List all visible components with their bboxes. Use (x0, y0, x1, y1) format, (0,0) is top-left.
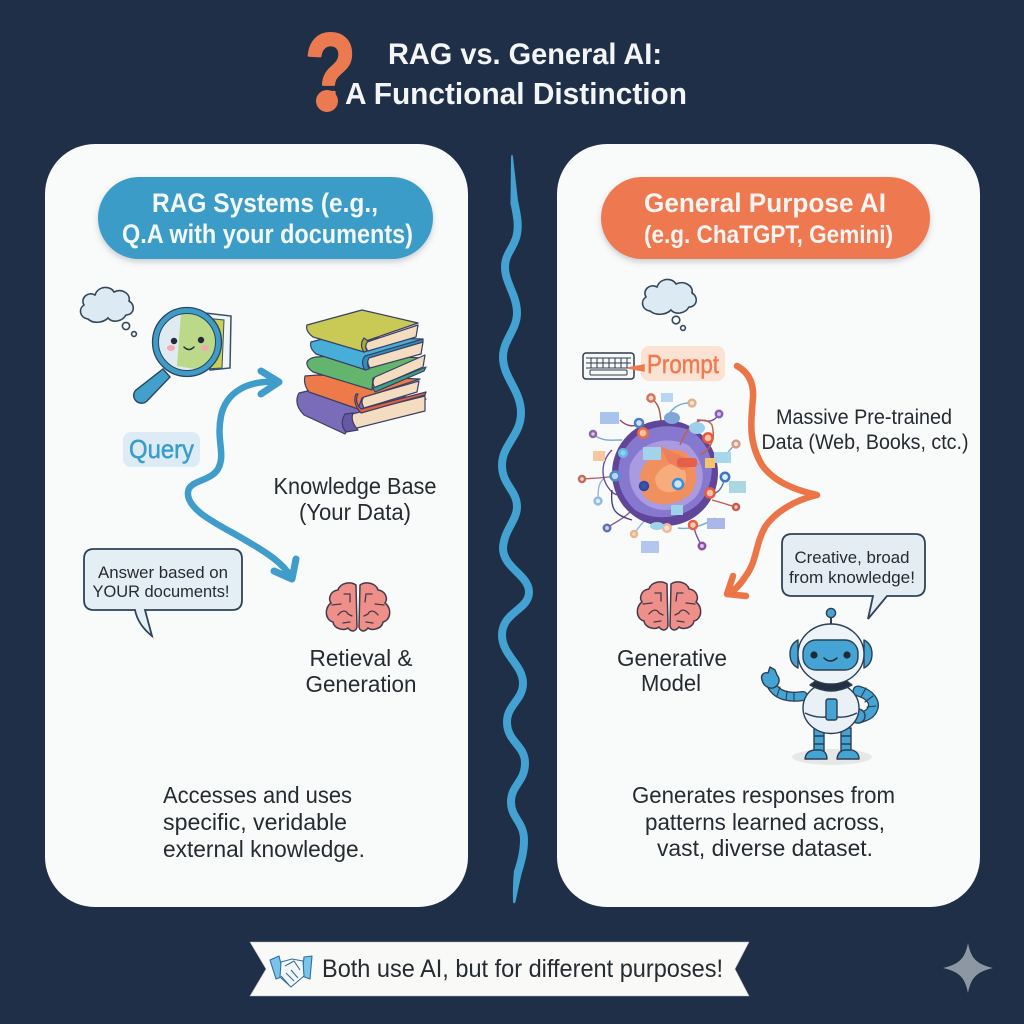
heading pill: RAG Systems: Q.A with your documents) (122, 219, 413, 249)
blue book (311, 337, 423, 370)
callout: answer based on your documents (84, 549, 242, 636)
label: massive pre-trained data: Massive Pre-trained (776, 406, 952, 429)
label: Knowledge Base: (Your Data) (299, 499, 411, 525)
panel: General Purpose AI (557, 144, 980, 907)
label: Knowledge Base (274, 473, 436, 525)
heading pill: RAG Systems (98, 177, 433, 259)
callout: answer based on your documents: Answer based on (98, 563, 228, 582)
icon: thought cloud (81, 287, 136, 336)
connector lines (582, 398, 736, 546)
label: Knowledge Base: Knowledge Base (274, 473, 436, 499)
network nodes (579, 394, 739, 549)
text block: general AI summary: vast, diverse dataset. (657, 835, 873, 861)
heading pill: General Purpose AI: General Purpose AI (644, 188, 886, 218)
icon: brain (637, 582, 701, 630)
label: massive pre-trained data: Data (Web, Books, ctc.) (762, 431, 968, 454)
title line two: A Functional Distinction (345, 76, 687, 111)
heading pill: General Purpose AI: (e.g. ChaTGPT, Gemini) (644, 221, 893, 249)
icon: thought cloud (643, 279, 696, 330)
purple book (297, 388, 426, 434)
icon: handshake (270, 956, 312, 987)
heading pill: RAG Systems: RAG Systems (e.g., (152, 188, 378, 218)
text block: general AI summary: Generates responses from (632, 782, 895, 808)
text block: RAG summary: Accesses and uses (163, 782, 352, 808)
panel: RAG systems (45, 144, 468, 907)
icon: question mark: ? (305, 12, 356, 128)
label: Query: Query (129, 434, 194, 464)
divider: wavy line (502, 154, 529, 904)
icon: neural data orb (579, 393, 746, 553)
olive book (307, 310, 418, 352)
label: Generative Model: Model (641, 670, 701, 696)
ribbon banner (250, 942, 749, 996)
label: Prompt: Prompt (647, 349, 720, 379)
robot head (830, 617, 832, 625)
banner text: Both use AI, but for different purposes! (322, 955, 723, 983)
text block: general AI summary: patterns learned across, (645, 809, 885, 835)
data cards (593, 393, 746, 553)
text block: RAG summary: external knowledge. (163, 836, 365, 862)
icon: brain (326, 583, 390, 631)
robot body (803, 682, 859, 734)
callout: creative, broad from knowledge (782, 534, 925, 619)
icon: magnifier over document (134, 308, 231, 403)
icon: sparkle star (943, 943, 993, 993)
icon: robot (762, 608, 876, 765)
icon: keyboard (583, 353, 634, 379)
label: massive pre-trained data (762, 406, 968, 454)
arrow: massive data flow (727, 366, 817, 596)
callout: creative, broad from knowledge: Creative, broad (794, 548, 910, 567)
callout: creative, broad from knowledge: from knowledge! (789, 568, 915, 587)
callout: answer based on your documents: YOUR documents! (92, 582, 230, 601)
label: Retieval and Generation: Generation (306, 671, 416, 697)
title line one: RAG vs. General AI: (388, 38, 662, 71)
text block: RAG summary: specific, veridable (163, 809, 347, 835)
title block (305, 12, 687, 128)
text block: RAG summary (163, 782, 365, 862)
label: Generative Model (617, 645, 727, 696)
orange book (304, 375, 426, 413)
label: Retieval and Generation: Retieval & (310, 645, 412, 671)
label: Generative Model: Generative (617, 645, 727, 671)
heading pill: General Purpose AI (601, 177, 930, 259)
robot left arm (772, 686, 803, 701)
robot right arm (858, 688, 876, 718)
label: Retieval and Generation (306, 645, 416, 697)
robot legs (805, 728, 859, 759)
icon: stack of books (297, 310, 426, 434)
green book (307, 355, 426, 392)
arrow: prompt to keyboard (628, 365, 644, 371)
text block: general AI summary (632, 782, 895, 861)
arrow: query flow (188, 371, 296, 579)
